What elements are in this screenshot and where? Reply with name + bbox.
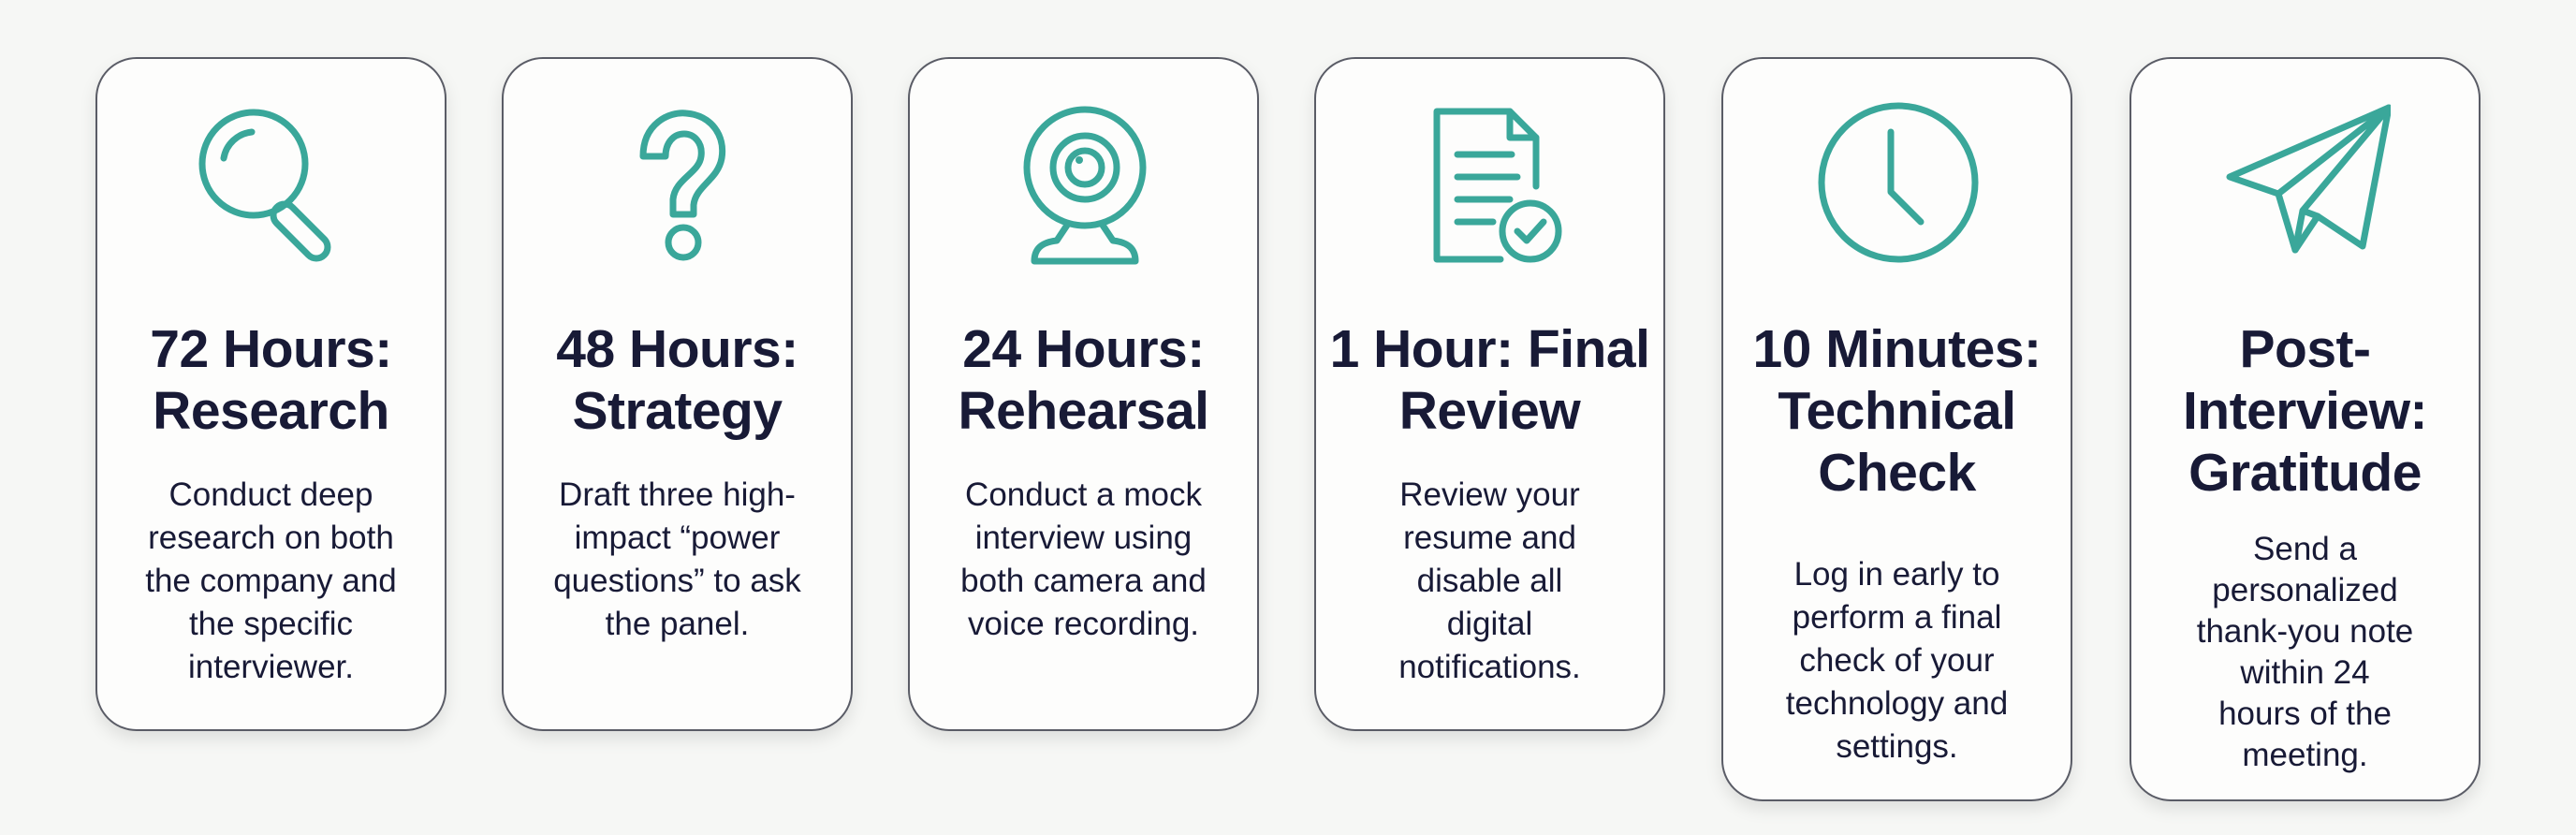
text block: interviewer. [188, 649, 354, 685]
title: Check [1818, 443, 1976, 503]
text block [145, 476, 397, 685]
title: Review [1399, 381, 1580, 441]
title: 48 Hours: [556, 319, 798, 379]
icon: document with check [1434, 109, 1561, 262]
text block: check of your [1799, 642, 1995, 679]
panel: 72 hours research [95, 57, 446, 731]
text block: thank-you note [2197, 613, 2413, 650]
text block: perform a final [1793, 599, 2001, 636]
text block [1398, 476, 1581, 685]
text block: Log in early to [1794, 556, 1999, 593]
title [2183, 319, 2427, 503]
title: Rehearsal [958, 381, 1209, 441]
text block: the company and [145, 563, 397, 599]
text block: resume and [1403, 520, 1576, 556]
panel: 10 minutes technical check [1721, 57, 2072, 801]
text block: technology and [1786, 685, 2008, 722]
text block: the panel. [606, 606, 749, 642]
title: 10 Minutes: [1752, 319, 2042, 379]
title [556, 319, 798, 441]
text block: personalized [2212, 572, 2398, 608]
text block [960, 476, 1207, 642]
text block: disable all [1417, 563, 1562, 599]
text block: Conduct a mock [965, 476, 1202, 513]
text block: settings. [1836, 728, 1958, 765]
icon: clock [1818, 103, 1979, 262]
text block: Send a [2253, 531, 2357, 567]
text block: interview using [975, 520, 1192, 556]
title: Interview: [2183, 381, 2427, 441]
text block: Review your [1399, 476, 1580, 513]
panel: 48 hours strategy [502, 57, 853, 731]
text block: voice recording. [968, 606, 1199, 642]
title: Technical [1778, 381, 2016, 441]
text block: Conduct deep [169, 476, 373, 513]
title [1330, 319, 1649, 441]
title: 72 Hours: [150, 319, 392, 379]
title [1752, 319, 2042, 503]
title: 1 Hour: Final [1330, 319, 1649, 379]
text block: meeting. [2242, 737, 2368, 773]
text block: impact “power [575, 520, 780, 556]
text block [2197, 531, 2413, 773]
text block: questions” to ask [553, 563, 801, 599]
title: Post- [2239, 319, 2370, 379]
text block: Draft three high- [559, 476, 796, 513]
title: Gratitude [2188, 443, 2422, 503]
text block: the specific [189, 606, 353, 642]
panel: 24 hours rehearsal [908, 57, 1259, 731]
icon: magnifying glass [198, 109, 331, 262]
text block [1786, 556, 2008, 765]
text block: within 24 [2240, 654, 2370, 691]
icon: question mark [640, 110, 726, 260]
text block: both camera and [960, 563, 1207, 599]
text block: research on both [148, 520, 394, 556]
title: Strategy [572, 381, 783, 441]
panel: post-interview gratitude [2130, 57, 2481, 801]
title [958, 319, 1209, 441]
title: 24 Hours: [962, 319, 1205, 379]
text block: hours of the [2218, 696, 2392, 732]
title [150, 319, 392, 441]
title: Research [153, 381, 389, 441]
panel: 1 hour final review [1314, 57, 1665, 731]
text block: digital [1447, 606, 1532, 642]
text block [553, 476, 801, 642]
icon: paper plane [2226, 105, 2391, 253]
text block: notifications. [1398, 649, 1581, 685]
icon: webcam [1024, 107, 1146, 264]
